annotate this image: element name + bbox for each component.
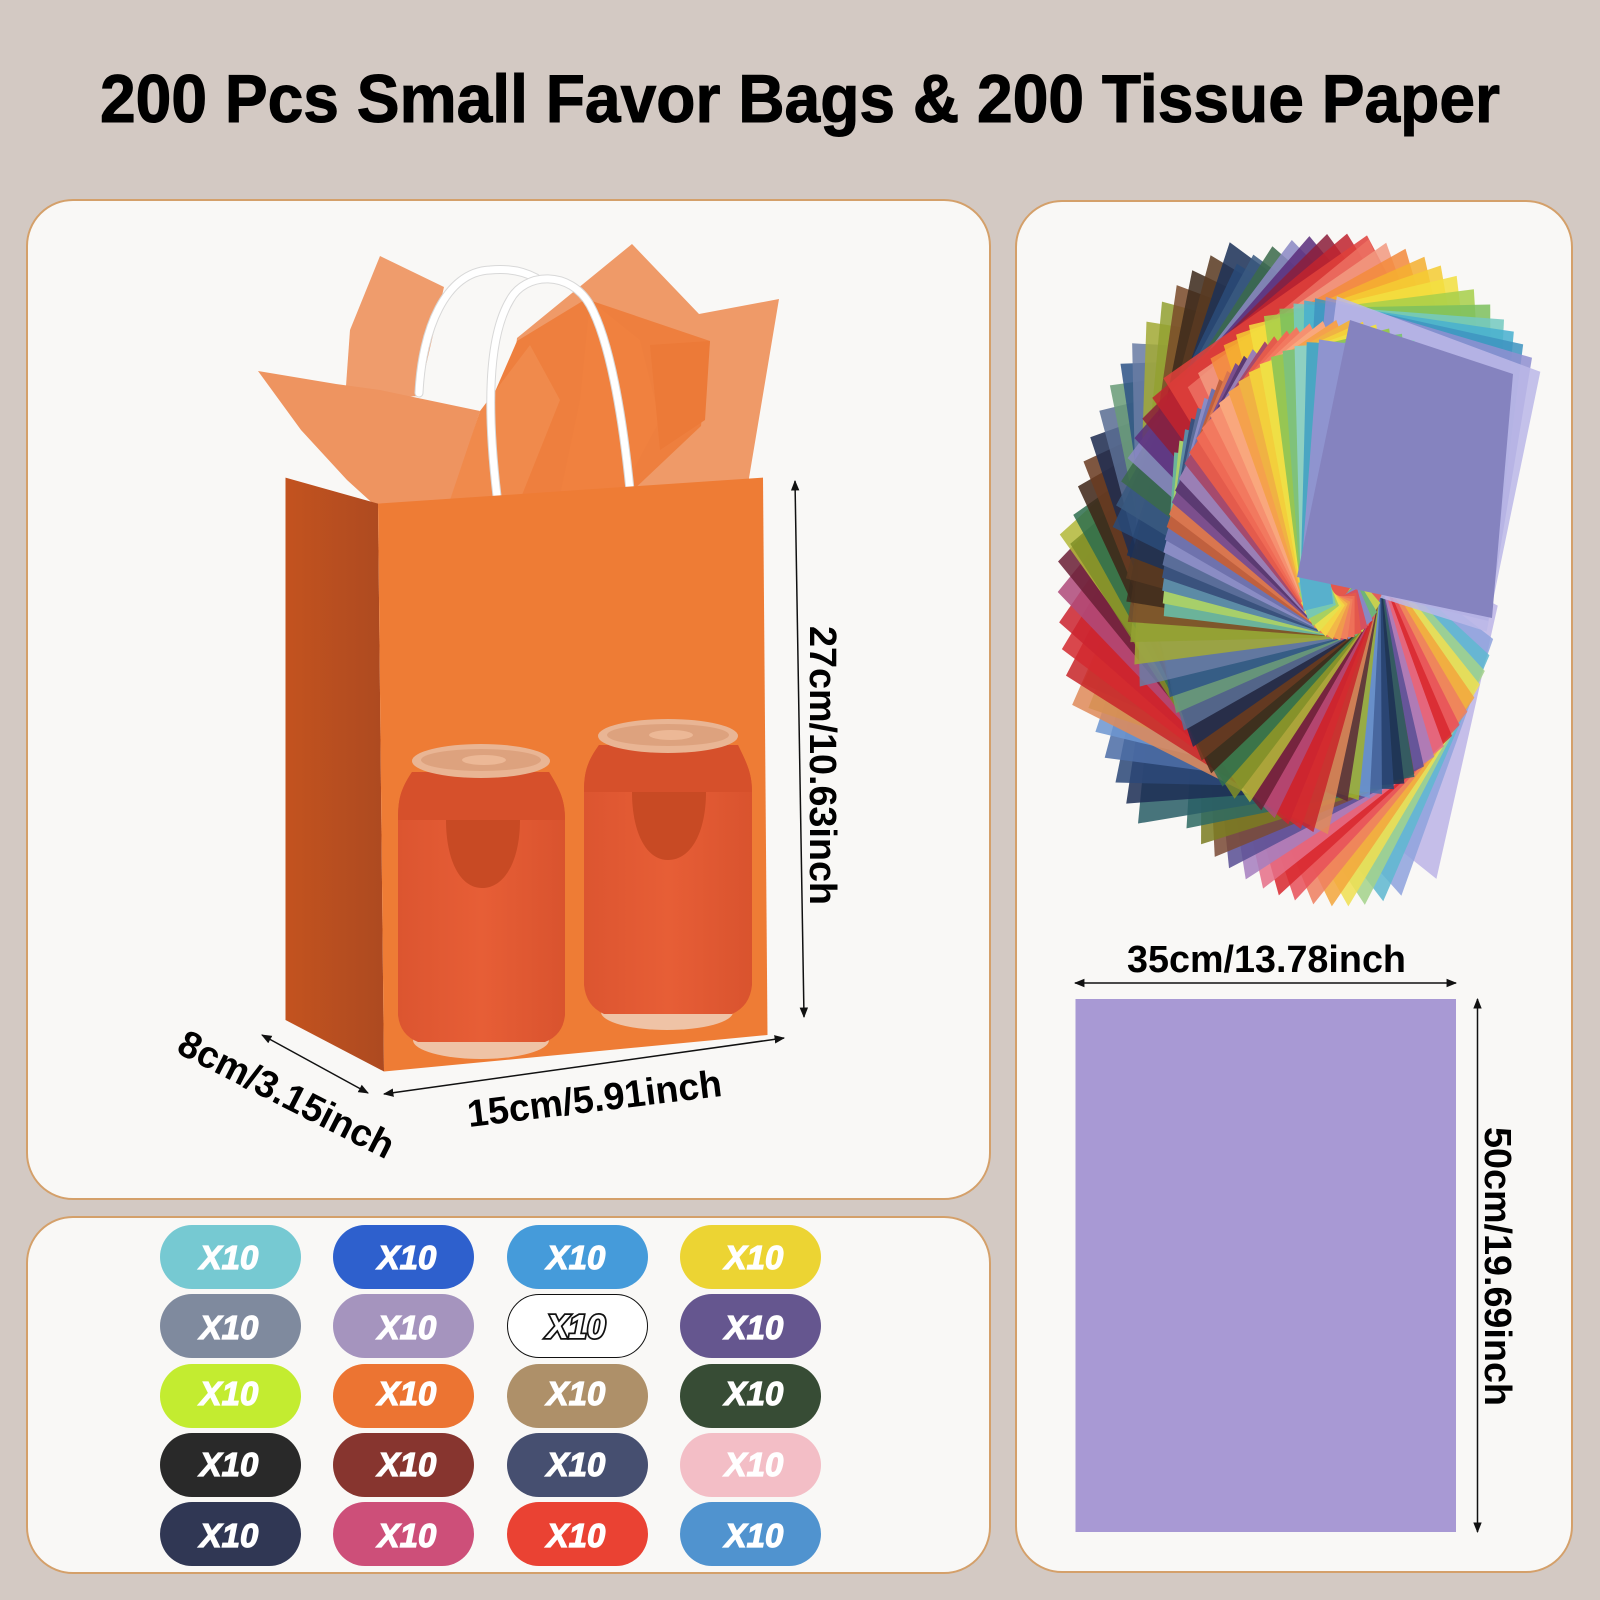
swatch row 5: X10	[376, 1517, 437, 1554]
tissue flat sheet	[1076, 999, 1456, 1532]
arrow: bag width	[384, 1038, 784, 1094]
swatch row 2: X10	[723, 1309, 784, 1346]
label: bag depth: 8cm/3.15inch	[171, 1023, 401, 1168]
icon: bag handles	[419, 269, 630, 496]
swatch row 4: X10	[198, 1446, 259, 1483]
icon: tissue paper in bag	[258, 244, 779, 510]
bag front panel	[378, 478, 768, 1072]
swatch row 5: X10	[723, 1517, 784, 1554]
swatch row 4: X10	[545, 1446, 606, 1483]
swatch row 3: X10	[545, 1375, 606, 1412]
arrow: bag height	[795, 481, 804, 1017]
label: tissue width: 35cm/13.78inch	[1127, 939, 1406, 981]
tissue paper fan	[1047, 182, 1544, 933]
title: 200 Pcs Small Favor Bags & 200 Tissue Paper	[100, 61, 1500, 137]
swatch row 3	[160, 1364, 821, 1428]
swatch row 2: X10	[376, 1309, 437, 1346]
tissue fan top sheet	[1297, 320, 1513, 618]
panel: color swatches	[27, 1217, 990, 1573]
arrow: tissue width	[1075, 982, 1456, 984]
bag side panel	[286, 478, 384, 1072]
icon: right can	[584, 719, 752, 1030]
swatch row 2: X10	[198, 1309, 259, 1346]
swatch row 3: X10	[376, 1375, 437, 1412]
label: bag height: 27cm/10.63inch	[801, 626, 843, 905]
swatch row 1: X10	[723, 1239, 784, 1276]
swatch row 4: X10	[723, 1446, 784, 1483]
arrow: bag depth	[262, 1035, 368, 1093]
swatch row 1: X10	[545, 1239, 606, 1276]
swatch row 2	[160, 1294, 821, 1358]
swatch row 5	[160, 1502, 821, 1566]
panel: favor bag	[27, 200, 990, 1199]
bag illustration	[258, 244, 779, 1072]
label: tissue height: 50cm/19.69inch	[1476, 1127, 1518, 1406]
swatch row 3: X10	[723, 1375, 784, 1412]
swatch row 4	[160, 1433, 821, 1497]
swatch row 4: X10	[376, 1446, 437, 1483]
swatch row 2: X10	[545, 1308, 606, 1345]
swatch row 1: X10	[198, 1239, 259, 1276]
swatch row 1	[160, 1225, 821, 1289]
label: bag width: 15cm/5.91inch	[465, 1063, 724, 1136]
color swatches	[160, 1225, 821, 1566]
swatch row 5: X10	[198, 1517, 259, 1554]
swatch row 1: X10	[376, 1239, 437, 1276]
panel: tissue paper	[1016, 201, 1572, 1572]
swatch row 5: X10	[545, 1517, 606, 1554]
arrow: tissue height	[1476, 999, 1478, 1532]
swatch row 3: X10	[198, 1375, 259, 1412]
icon: left can	[398, 744, 565, 1059]
